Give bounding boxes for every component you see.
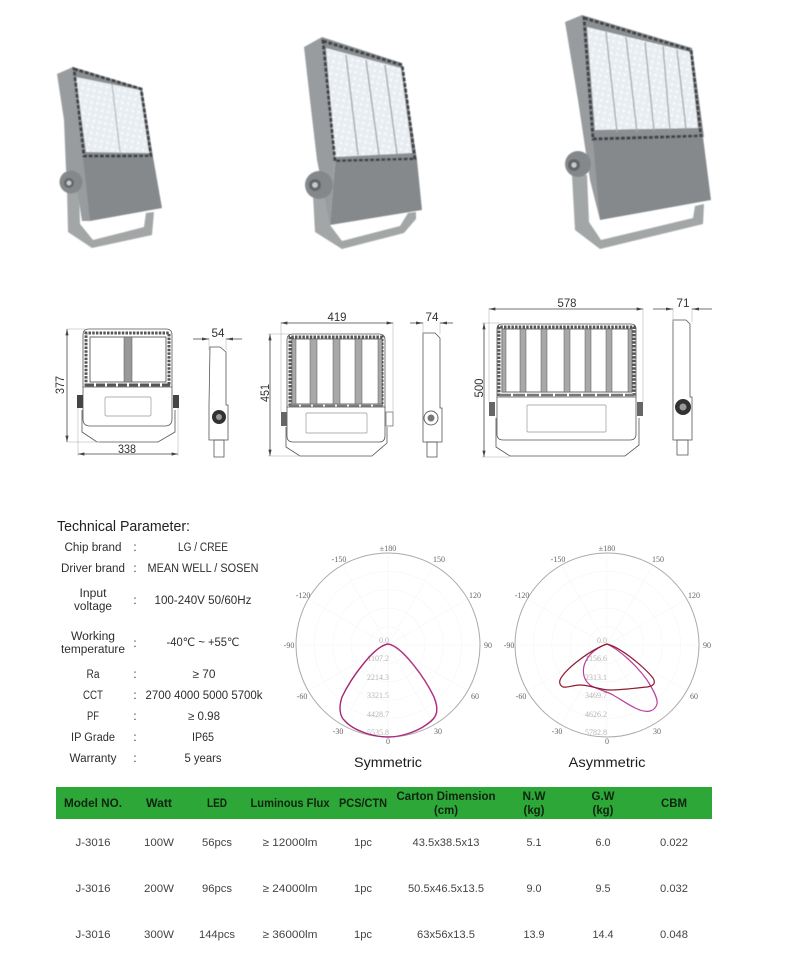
module dividers — [606, 32, 686, 132]
row: chip brand: : — [133, 542, 137, 554]
row: chip brand — [64, 542, 228, 554]
bracket — [67, 190, 154, 248]
table header: Carton Dimension — [396, 791, 496, 803]
row: warranty — [70, 753, 222, 765]
curve: red plane — [560, 644, 654, 690]
dimension 500: 500 — [474, 378, 486, 398]
angle labels: 90 — [703, 641, 711, 650]
housing side — [57, 67, 90, 221]
table header — [56, 787, 712, 819]
technical parameter heading: Technical Parameter: — [57, 518, 190, 535]
chart caption: Asymmetric — [568, 754, 646, 770]
side profile — [673, 320, 692, 455]
table row: 100W: 6.0 — [596, 837, 610, 849]
light panel frame — [73, 67, 153, 159]
table row: 200W: 9.5 — [596, 883, 610, 895]
table row: 300W: 13.9 — [524, 929, 544, 941]
table row: 100W: 43.5x38.5x13 — [412, 837, 480, 849]
row: working temperature: temperature — [61, 644, 125, 656]
radial value labels: 2214.3 — [367, 673, 389, 682]
radial value labels — [585, 636, 607, 737]
table row: 200W — [76, 883, 688, 895]
dimension 74: 74 — [426, 312, 439, 324]
radial value labels: 0.0 — [379, 636, 389, 645]
row: warranty: 5 years — [184, 753, 222, 765]
dimension drawing: 200W front — [260, 312, 393, 456]
lower housing — [330, 160, 422, 225]
fixture outline — [489, 324, 643, 456]
fixture outline — [77, 329, 179, 442]
light panel frame — [322, 37, 417, 163]
table header: G.W — [592, 791, 615, 803]
frame slots — [323, 41, 415, 161]
row: chip brand: Chip brand — [64, 542, 122, 554]
table row: 300W: ≥ 36000lm — [262, 929, 318, 941]
table row: 100W: 1pc — [354, 837, 372, 849]
angle labels: -150 — [551, 555, 565, 564]
product photo: 100W flood light — [57, 67, 162, 248]
table row: 300W: 1pc — [354, 929, 372, 941]
row: Ra: : — [133, 669, 137, 681]
dimension drawing: 200W side — [410, 312, 453, 457]
row: driver brand: MEAN WELL / SOSEN — [148, 563, 258, 575]
table row: 300W: 0.048 — [660, 929, 688, 941]
table row: 200W: 200W — [144, 883, 175, 895]
row: working temperature — [61, 631, 240, 656]
radial value labels: 2313.1 — [585, 673, 607, 682]
angle labels: ±180 — [380, 544, 396, 553]
radial value labels: 3469.7 — [585, 691, 607, 700]
radial value labels: 0.0 — [597, 636, 607, 645]
table row: 100W: J-3016 — [76, 837, 110, 849]
table row: 100W: 5.1 — [526, 837, 542, 849]
radial value labels: 4428.7 — [367, 710, 389, 719]
lower housing — [83, 157, 162, 221]
row: working temperature: Working — [71, 631, 115, 643]
table header: Watt — [146, 798, 172, 810]
LED glass — [326, 48, 412, 157]
row: IP grade: : — [133, 732, 137, 744]
table row: 200W: 0.032 — [660, 883, 688, 895]
angle labels: 0 — [386, 737, 390, 746]
dimension 451: 451 — [260, 384, 272, 402]
table row: 300W: 14.4 — [592, 929, 614, 941]
dimension 419 — [281, 312, 393, 412]
radial value labels: 4626.2 — [585, 710, 607, 719]
row: IP grade — [71, 732, 214, 744]
radial value labels — [367, 636, 389, 737]
row: PF: : — [133, 711, 137, 723]
dimension 377: 377 — [55, 376, 67, 394]
row: input voltage: 100-240V 50/60Hz — [154, 595, 252, 607]
angle labels: -120 — [296, 591, 310, 600]
row: working temperature: : — [133, 638, 137, 650]
housing side — [304, 37, 335, 225]
angle labels — [504, 544, 711, 746]
table row: 100W: 100W — [144, 837, 175, 849]
dimension 451 — [260, 334, 300, 456]
product photo: 300W flood light — [565, 15, 711, 249]
distribution curve — [340, 644, 437, 738]
angle labels: 90 — [484, 641, 492, 650]
table row: 300W: 144pcs — [199, 929, 235, 941]
angle labels: 120 — [469, 591, 481, 600]
angle labels: 60 — [471, 692, 479, 701]
bracket — [572, 175, 704, 249]
angle labels: 150 — [652, 555, 664, 564]
row: input voltage: : — [133, 595, 137, 607]
dimension 578 — [489, 298, 643, 402]
row: PF — [87, 711, 220, 723]
table header: (kg) — [524, 805, 545, 817]
radial value labels: 5535.8 — [367, 728, 389, 737]
table row: 100W: 56pcs — [202, 837, 233, 849]
LED glass — [76, 77, 149, 153]
table row: 300W — [76, 929, 688, 941]
table row: 300W: J-3016 — [76, 929, 110, 941]
dimension drawing: 300W front — [474, 298, 643, 457]
row: IP grade: IP Grade — [71, 732, 115, 744]
table row: 200W: J-3016 — [76, 883, 110, 895]
radial value labels: 3321.5 — [367, 691, 389, 700]
polar chart: asymmetric — [504, 544, 711, 770]
dimension drawing: 100W side — [193, 328, 242, 457]
dimension 419: 419 — [328, 312, 346, 324]
radial value labels: 1107.2 — [367, 654, 389, 663]
table header: Luminous Flux — [250, 798, 330, 810]
row: CCT — [83, 690, 263, 702]
angle labels: -30 — [552, 727, 562, 736]
row: Ra — [86, 669, 216, 681]
knob — [565, 151, 591, 177]
row: input voltage: voltage — [74, 601, 112, 613]
row: driver brand — [61, 563, 258, 575]
radial value labels: 1156.6 — [585, 654, 607, 663]
angle labels: 150 — [433, 555, 445, 564]
LED glass — [587, 27, 698, 130]
dimension 74 — [410, 312, 453, 334]
row: warranty: Warranty — [70, 753, 117, 765]
module dividers — [346, 55, 397, 155]
module divider — [112, 84, 120, 152]
table header: LED — [207, 798, 227, 810]
bracket — [313, 195, 416, 249]
frame slots — [584, 18, 701, 139]
specification table — [56, 787, 712, 941]
knob — [305, 171, 333, 199]
row: PF: PF — [87, 711, 99, 723]
table row: 200W: 96pcs — [202, 883, 233, 895]
row: Ra: ≥ 70 — [192, 669, 216, 681]
row: IP grade: IP65 — [192, 732, 214, 744]
row: CCT: CCT — [83, 690, 103, 702]
table header: PCS/CTN — [339, 798, 387, 810]
table row: 200W: 50.5x46.5x13.5 — [408, 883, 484, 895]
frame slots — [74, 69, 151, 156]
radial value labels: 5782.8 — [585, 728, 607, 737]
row: working temperature: -40℃ ~ +55℃ — [166, 637, 240, 649]
dimension drawing: 300W side — [653, 298, 712, 455]
table row: 100W — [76, 837, 688, 849]
row: CCT: 2700 4000 5000 5700k — [146, 690, 263, 702]
angle labels: -30 — [333, 727, 343, 736]
table header: N.W — [522, 791, 546, 803]
table row: 200W: ≥ 24000lm — [262, 883, 318, 895]
row: input voltage: Input — [80, 588, 107, 600]
table header: (cm) — [434, 805, 458, 817]
row: input voltage — [74, 588, 252, 613]
dimension 500 — [474, 323, 510, 457]
lower housing — [593, 137, 711, 220]
row: PF: ≥ 0.98 — [188, 711, 220, 723]
table row: 200W: 1pc — [354, 883, 372, 895]
angle labels: 30 — [653, 727, 661, 736]
dimension 71 — [653, 298, 712, 322]
table row: 100W: 0.022 — [660, 837, 688, 849]
table header: CBM — [661, 798, 687, 810]
polar grid — [515, 553, 699, 737]
angle labels: -60 — [516, 692, 526, 701]
dimension 54: 54 — [212, 328, 225, 340]
polar chart: symmetric — [284, 544, 492, 770]
table row: 100W: ≥ 12000lm — [262, 837, 318, 849]
row: warranty: : — [133, 753, 137, 765]
angle labels: ±180 — [599, 544, 615, 553]
dimension 338: 338 — [118, 444, 136, 456]
side profile — [209, 347, 228, 457]
table header: (kg) — [592, 805, 614, 817]
angle labels: 60 — [690, 692, 698, 701]
table row: 300W: 300W — [144, 929, 175, 941]
product photo: 200W flood light — [304, 37, 422, 249]
row: driver brand: Driver brand — [61, 563, 125, 575]
side profile — [423, 333, 442, 457]
chart caption: Symmetric — [354, 754, 422, 770]
angle labels: -150 — [332, 555, 346, 564]
knob — [60, 170, 82, 194]
row: chip brand: LG / CREE — [178, 542, 228, 554]
table row: 200W: 9.0 — [526, 883, 542, 895]
curve: magenta plane — [583, 644, 657, 711]
table row: 300W: 63x56x13.5 — [417, 929, 475, 941]
table header: Model NO. — [64, 798, 122, 810]
row: CCT: : — [133, 690, 137, 702]
dimension 578: 578 — [558, 298, 576, 310]
row: driver brand: : — [133, 563, 137, 575]
dimension 71: 71 — [676, 298, 690, 310]
fixture outline — [281, 334, 393, 456]
row: Ra: Ra — [86, 669, 100, 681]
angle labels: 30 — [434, 727, 442, 736]
parameter list — [61, 542, 263, 765]
housing side — [565, 15, 600, 220]
angle labels: -90 — [284, 641, 294, 650]
angle labels: -90 — [504, 641, 514, 650]
angle labels — [284, 544, 492, 746]
light panel frame — [582, 15, 704, 142]
dimension drawing: 100W front — [55, 329, 179, 456]
angle labels: -120 — [515, 591, 529, 600]
angle labels: -60 — [297, 692, 307, 701]
angle labels: 0 — [605, 737, 609, 746]
polar grid — [296, 553, 480, 737]
angle labels: 120 — [688, 591, 700, 600]
